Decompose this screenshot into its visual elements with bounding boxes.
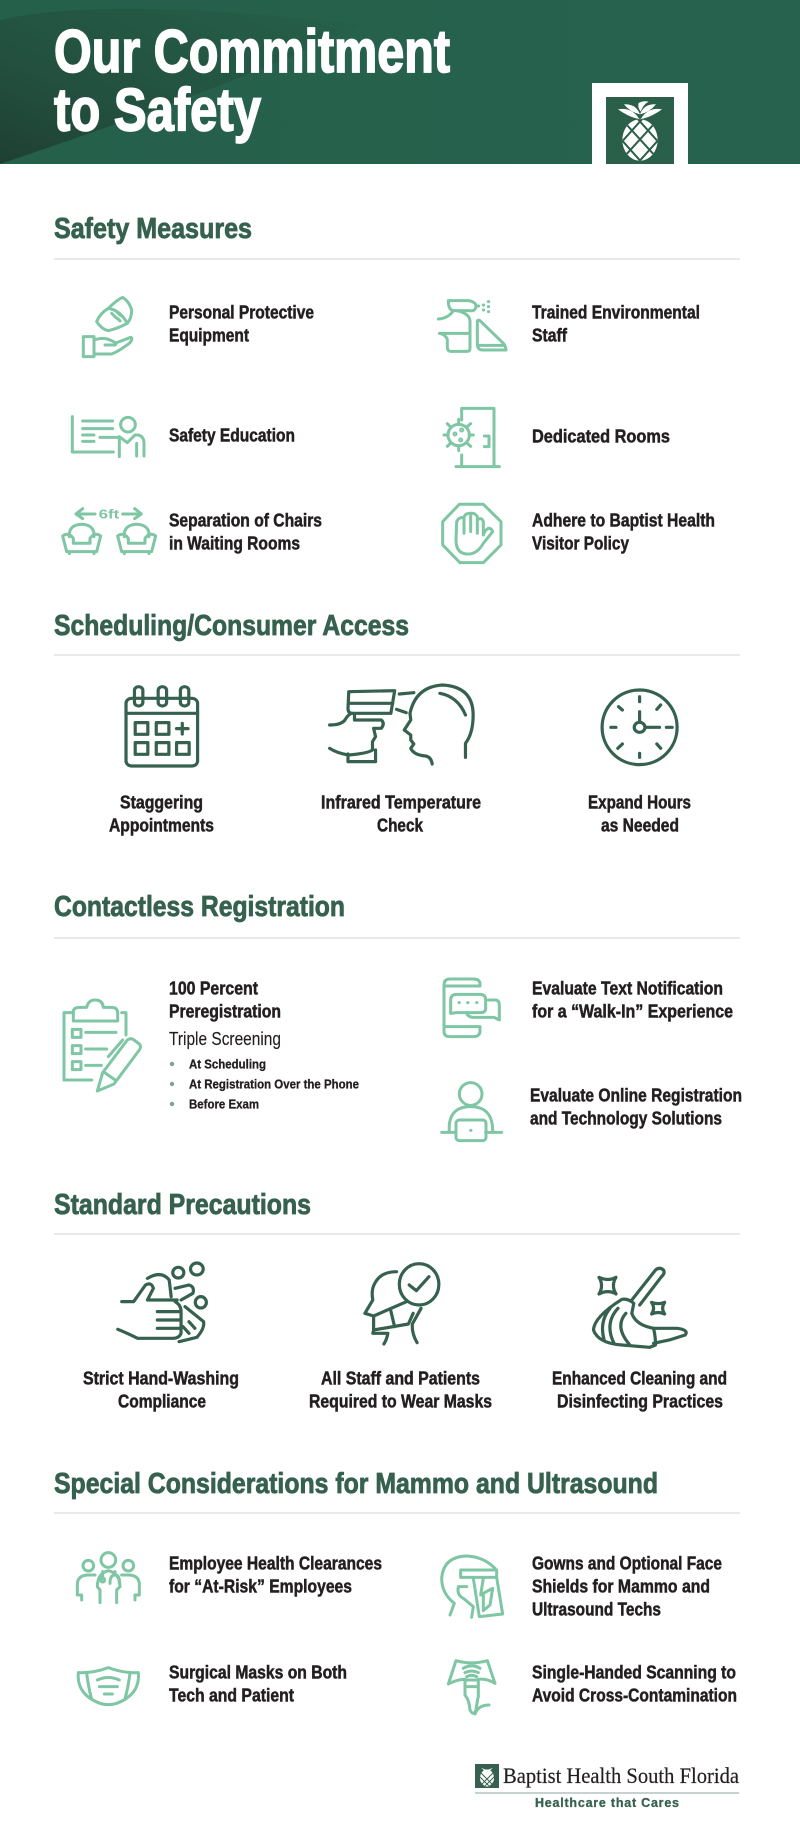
icon: teacher at board (72, 417, 144, 457)
text: personal protective equipment: Personal Protective (169, 302, 314, 322)
icon: clipboard and pen (64, 1000, 140, 1091)
text: surgical masks: Surgical Masks on Both (169, 1662, 347, 1682)
panel: scheduling (54, 610, 740, 836)
panel: special considerations (54, 1468, 740, 1714)
text: online registration: and Technology Solutions (530, 1108, 722, 1128)
footer logo: Baptist Health South Florida: Healthcare that Cares (535, 1796, 679, 1810)
text: visitor policy: Adhere to Baptist Health (532, 510, 715, 530)
text: single-handed scanning: Avoid Cross-Contamination (532, 1686, 737, 1706)
text: surgical masks: Tech and Patient (169, 1686, 294, 1706)
icon: ultrasound probe (448, 1661, 495, 1714)
icon: stop hand (443, 504, 501, 563)
text: hand washing: Compliance (118, 1392, 206, 1412)
text: health clearances: Employee Health Clearances (169, 1554, 382, 1574)
text: dedicated rooms: Dedicated Rooms (532, 426, 670, 446)
text: cleaning (552, 1368, 727, 1412)
icon: hand washing (118, 1263, 206, 1342)
text: cleaning: Enhanced Cleaning and (552, 1368, 727, 1388)
icon: surgical mask (78, 1668, 138, 1705)
footer logo: Baptist Health South Florida (475, 1763, 739, 1810)
text: masks: Required to Wear Masks (309, 1392, 492, 1412)
bullet list: triple screening (170, 1056, 359, 1112)
text: visitor policy: Visitor Policy (532, 534, 629, 554)
icon: calendar (126, 687, 198, 766)
heading: contactless registration: Contactless Registration (54, 891, 345, 923)
text: trained environmental staff: Trained Environmental (532, 302, 700, 322)
text: infrared temperature check: Infrared Temperature (321, 792, 481, 812)
icon: mask over hand (83, 297, 132, 357)
text: separation of chairs: Separation of Chairs (169, 510, 322, 530)
text: single-handed scanning (532, 1662, 737, 1706)
title: to Safety (54, 76, 262, 144)
text: masks: All Staff and Patients (321, 1368, 480, 1388)
text: infrared temperature check (321, 792, 481, 836)
title: Our Commitment (54, 18, 450, 85)
text: trained environmental staff (532, 302, 700, 346)
text: expand hours: as Needed (601, 816, 679, 836)
icon: masked head with check (365, 1264, 439, 1344)
text: masks (309, 1368, 492, 1412)
text: safety education: Safety Education (169, 426, 295, 446)
text: trained environmental staff: Staff (532, 326, 568, 346)
bullet list: triple screening: At Registration Over the Phone (189, 1076, 359, 1092)
text: surgical masks (169, 1662, 347, 1706)
heading: safety measures: Safety Measures (54, 213, 252, 245)
logo: pineapple badge (592, 83, 688, 172)
icon: clock (602, 690, 677, 765)
icon: spray bottle and cloth (438, 301, 506, 351)
icon: person with laptop (442, 1083, 502, 1141)
text: preregistration (169, 978, 281, 1049)
text: text notification: for a “Walk-In” Experience (532, 1002, 733, 1022)
text: expand hours: Expand Hours (588, 792, 691, 812)
text: staggering appointments: Staggering (120, 792, 203, 812)
text: online registration (530, 1086, 742, 1128)
panel: standard precautions (54, 1189, 740, 1412)
text: preregistration: 100 Percent (169, 978, 258, 998)
text: online registration: Evaluate Online Registration (530, 1086, 742, 1106)
text: gowns and shields: Ultrasound Techs (532, 1600, 661, 1620)
bullet list: triple screening: At Scheduling (189, 1056, 266, 1072)
icon: six feet apart chairs (63, 507, 156, 554)
text: health clearances: for “At-Risk” Employees (169, 1576, 352, 1596)
panel: contactless registration (54, 891, 742, 1141)
text: staggering appointments (109, 792, 214, 836)
text: text notification (532, 978, 733, 1022)
text: hand washing (83, 1368, 239, 1412)
text: text notification: Evaluate Text Notification (532, 978, 723, 998)
icon: face shield (442, 1556, 503, 1617)
text: separation of chairs: in Waiting Rooms (169, 534, 300, 554)
bullet list: triple screening: Before Exam (189, 1096, 259, 1112)
text: gowns and shields: Gowns and Optional Face (532, 1554, 722, 1574)
footer logo: Baptist Health South Florida: Baptist Health South Florida (503, 1763, 739, 1788)
header banner (0, 0, 800, 172)
text: infrared temperature check: Check (377, 816, 424, 836)
icon: phone with messages (444, 979, 499, 1037)
text: personal protective equipment: Equipment (169, 326, 249, 346)
icon: virus at door (444, 408, 499, 467)
text: staggering appointments: Appointments (109, 816, 214, 836)
icon: infrared thermometer (330, 685, 473, 764)
text: gowns and shields: Shields for Mammo and (532, 1576, 710, 1596)
text: personal protective equipment (169, 302, 314, 346)
heading: standard precautions: Standard Precautions (54, 1189, 311, 1221)
heading: scheduling: Scheduling/Consumer Access (54, 610, 409, 642)
text: preregistration: Preregistration (169, 1002, 281, 1022)
icon: mop and sparkles (593, 1268, 686, 1347)
icon: six feet apart chairs: 6ft (99, 507, 120, 522)
text: hand washing: Strict Hand-Washing (83, 1368, 239, 1388)
heading: special considerations: Special Considerations for Mammo and Ultrasound (54, 1468, 658, 1500)
text: preregistration: Triple Screening (169, 1029, 281, 1049)
text: expand hours (588, 792, 691, 836)
icon: medical staff (77, 1553, 139, 1603)
text: separation of chairs (169, 510, 322, 554)
text: gowns and shields (532, 1554, 722, 1620)
text: single-handed scanning: Single-Handed Scanning to (532, 1662, 736, 1682)
panel: safety measures (54, 213, 740, 563)
text: health clearances (169, 1554, 382, 1596)
title (54, 18, 450, 144)
text: visitor policy (532, 510, 715, 554)
text: cleaning: Disinfecting Practices (557, 1392, 723, 1412)
